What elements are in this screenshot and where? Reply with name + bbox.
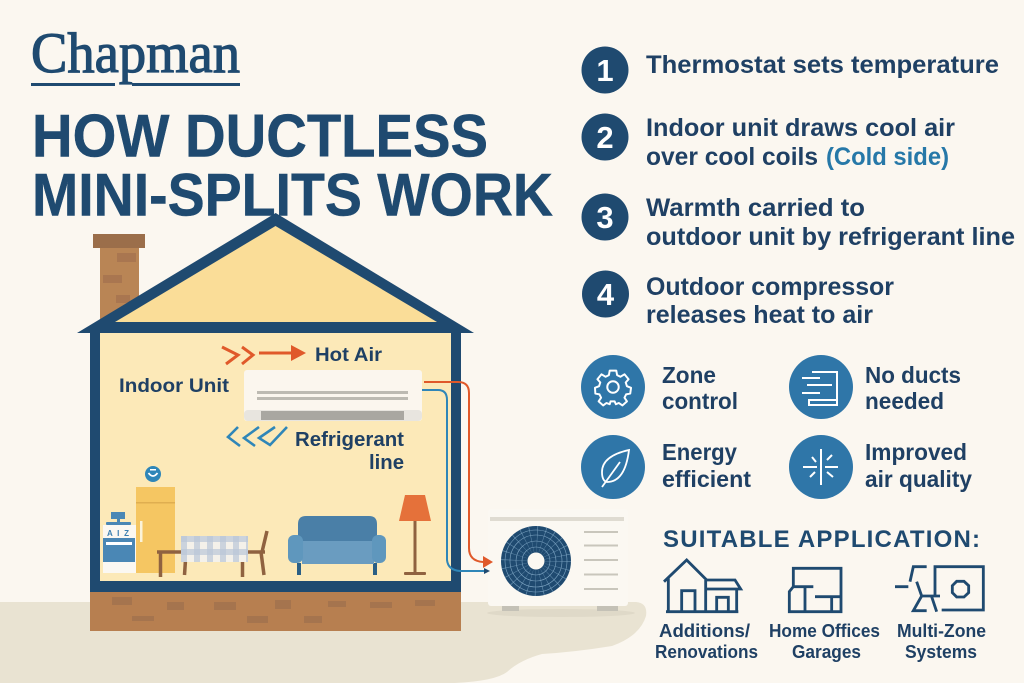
- feature: improved air quality: Improved: [865, 439, 967, 465]
- step 4: releases heat to air: [646, 301, 873, 329]
- feature: no ducts needed: needed: [865, 388, 944, 414]
- logo: Chapman: Chapman: [31, 22, 240, 85]
- foundation: [90, 592, 461, 631]
- label: refrigerant line: [295, 429, 404, 474]
- feature: energy efficient: efficient: [662, 466, 751, 492]
- feature: no ducts needed: [789, 355, 961, 419]
- label: indoor unit: Indoor Unit: [119, 375, 230, 397]
- application: multi-zone systems: Systems: [905, 642, 977, 662]
- application: home offices and garages: Garages: [792, 642, 861, 662]
- title: [32, 102, 553, 228]
- stove: A I Z: [107, 529, 129, 538]
- icon: air sparkle: [803, 449, 838, 485]
- icon: duct lines: [802, 372, 837, 405]
- application: additions and renovations: [655, 560, 758, 662]
- step 2: [582, 114, 955, 171]
- label: refrigerant line: Refrigerant: [295, 429, 404, 451]
- step 3: Warmth carried to: [646, 194, 865, 222]
- application: additions and renovations: Additions/: [659, 621, 750, 641]
- application: home offices and garages: Home Offices: [769, 621, 880, 641]
- indoor unit: [244, 370, 422, 421]
- icon: leaf: [602, 450, 629, 487]
- fridge: [136, 487, 175, 573]
- stove: [103, 512, 136, 573]
- feature: zone control: control: [662, 388, 738, 414]
- application: additions and renovations: Renovations: [655, 642, 758, 662]
- icon: thermostat: [145, 466, 161, 482]
- step 3: [582, 194, 1015, 251]
- dining table and chairs: [157, 531, 267, 577]
- step 2: Indoor unit draws cool air: [646, 114, 955, 142]
- feature: no ducts needed: No ducts: [865, 362, 961, 388]
- icon: house with extension: [664, 560, 741, 612]
- label: refrigerant line: line: [369, 452, 404, 474]
- cold air arrows: [228, 427, 287, 446]
- sofa: [288, 516, 386, 575]
- heading: suitable application: SUITABLE APPLICATION:: [663, 526, 980, 553]
- feature: improved air quality: air quality: [865, 466, 972, 492]
- title: MINI-SPLITS WORK: [32, 162, 553, 228]
- floor lamp: [399, 495, 431, 575]
- feature: improved air quality: [789, 435, 972, 499]
- step 4: Outdoor compressor: [646, 273, 894, 301]
- feature: energy efficient: [581, 435, 751, 499]
- step 1: 1: [596, 53, 614, 88]
- step 3: outdoor unit by refrigerant line: [646, 223, 1015, 251]
- refrigerant line: cold (blue) with arrow: [422, 390, 490, 574]
- interior room and walls: [90, 333, 461, 592]
- roof: [77, 213, 474, 333]
- feature: energy efficient: Energy: [662, 439, 737, 465]
- step 2: (Cold side): [826, 143, 949, 171]
- fan: [501, 526, 571, 596]
- step 2: over cool coils: [646, 143, 818, 171]
- icon: multi-zone plan: [895, 567, 983, 612]
- step 4: [582, 270, 894, 329]
- step 3: 3: [596, 200, 614, 235]
- step 1: Thermostat sets temperature: [646, 51, 999, 79]
- step 4: 4: [597, 277, 615, 312]
- application: multi-zone systems: [895, 567, 986, 662]
- icon: floor plan: [789, 568, 841, 612]
- chimney: [93, 234, 145, 323]
- feature: zone control: [581, 355, 738, 419]
- application: home offices and garages: [769, 568, 880, 662]
- house: [77, 213, 474, 631]
- icon: gear: [595, 371, 631, 405]
- step 1: [582, 46, 999, 94]
- label: hot air: Hot Air: [315, 345, 383, 366]
- feature: zone control: Zone: [662, 362, 716, 388]
- ground: [0, 602, 646, 683]
- step 2: 2: [596, 120, 614, 155]
- title: HOW DUCTLESS: [32, 102, 488, 170]
- application: multi-zone systems: Multi-Zone: [897, 621, 986, 641]
- refrigerant line: hot (red) with arrow: [424, 382, 493, 568]
- hot air arrows: [222, 345, 306, 364]
- outdoor unit: [487, 509, 635, 617]
